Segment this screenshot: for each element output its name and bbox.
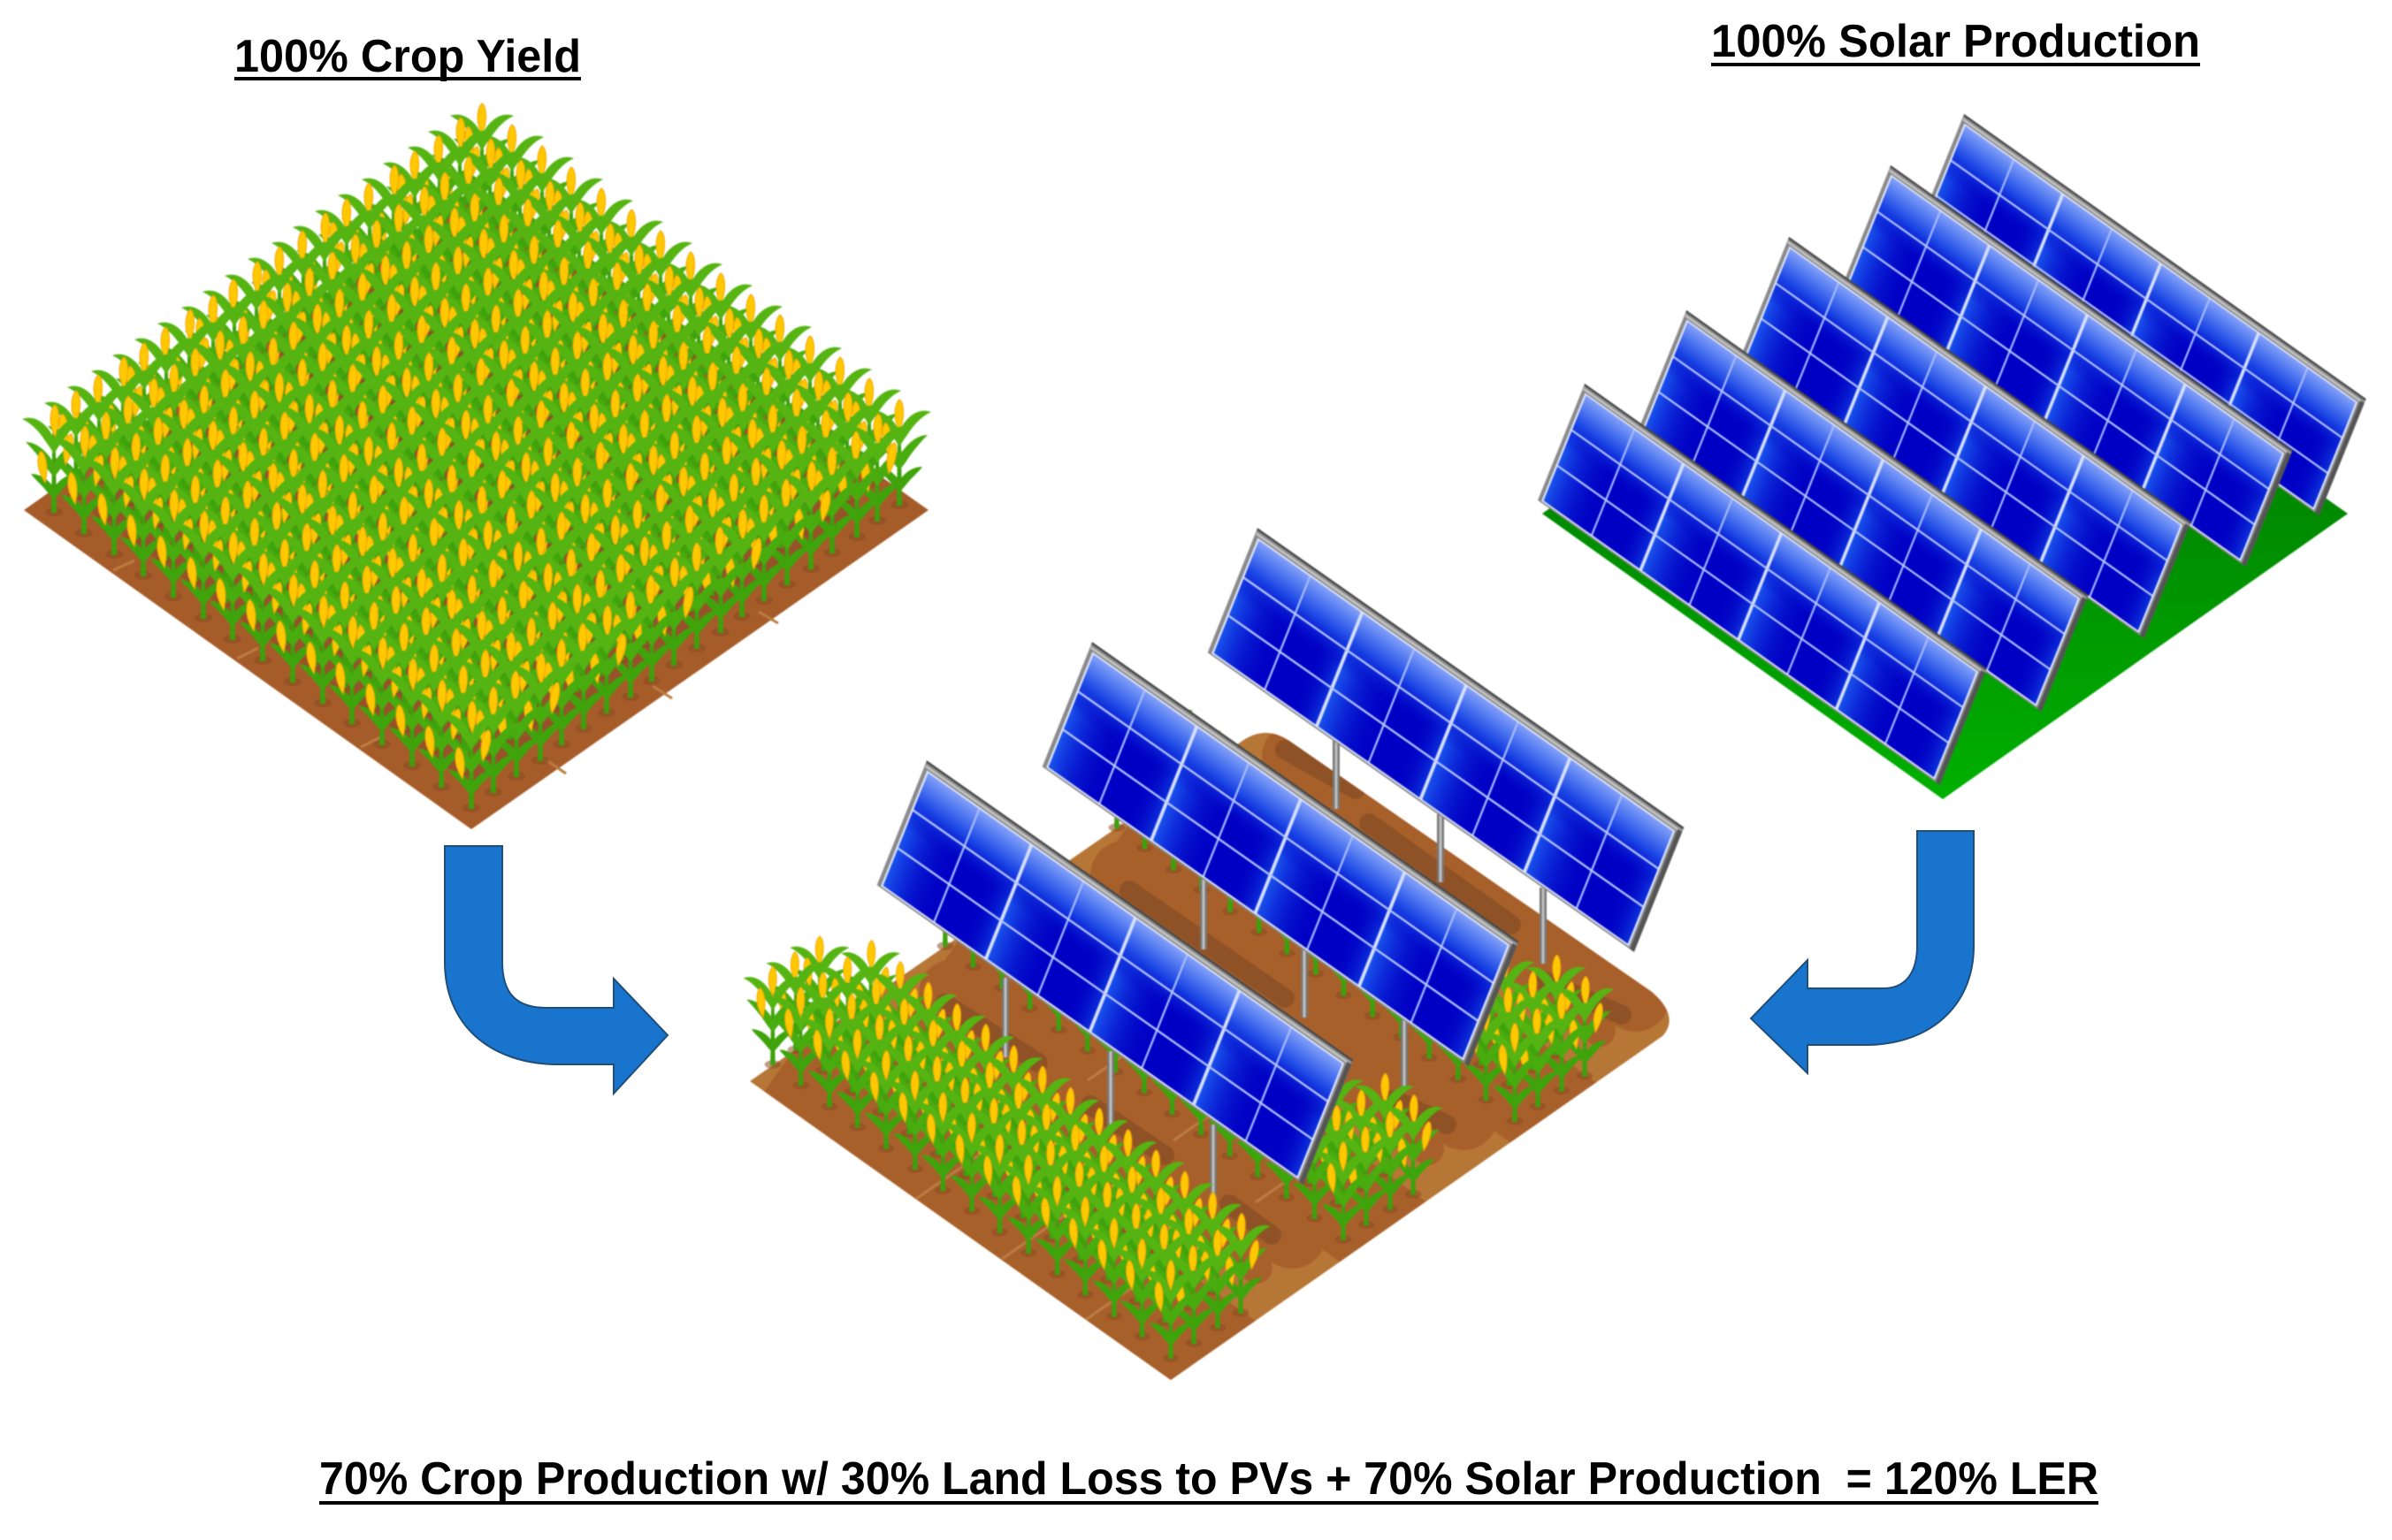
field soil <box>24 191 929 829</box>
arrow: solar to agrivoltaic <box>1751 831 1974 1073</box>
back corn block <box>1087 699 1615 1125</box>
heading: 100% Crop Yield: 100% Crop Yield <box>234 31 581 82</box>
footer equation: 70% Crop Production w/ 30% Land Loss to PVs + 70% Solar Production = 120% LER <box>319 1453 2098 1505</box>
panel: agrivoltaic system <box>743 528 1684 1380</box>
middle corn block <box>915 818 1443 1244</box>
arrow: field to agrivoltaic <box>445 846 668 1094</box>
green ground <box>1542 228 2348 799</box>
back panel poles <box>1336 741 1543 964</box>
back solar panel <box>1208 528 1684 952</box>
front solar panel <box>877 760 1353 1185</box>
panel: solar array <box>1538 114 2366 799</box>
corn plants <box>22 103 931 812</box>
solar panel rows <box>1538 114 2366 785</box>
middle panel poles <box>1204 880 1404 1088</box>
panel: crop field <box>22 103 931 829</box>
heading: 100% Solar Production: 100% Solar Production <box>1711 16 2200 67</box>
front corn block <box>743 936 1271 1362</box>
front panel poles <box>1005 978 1213 1198</box>
middle solar panel <box>1043 642 1518 1066</box>
plot soil <box>750 733 1670 1380</box>
